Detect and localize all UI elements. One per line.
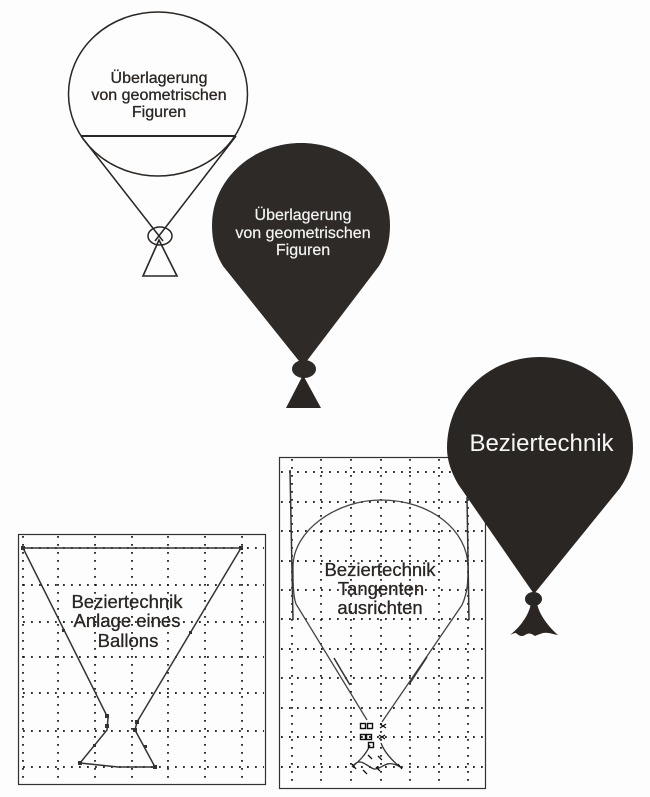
panel: filled Bezier balloon xyxy=(447,357,633,636)
basket triangle xyxy=(286,375,321,408)
neck ellipse xyxy=(525,592,542,606)
panel: Bezier construction frame, balloon outline: Anlage eines xyxy=(74,610,180,631)
rope lines xyxy=(81,136,236,241)
panel: filled balloon from geometric figures: Figuren xyxy=(276,242,330,259)
icon: envelope ellipse xyxy=(68,12,248,176)
panel: Bezier construction frame, balloon outline: Ballons xyxy=(98,630,158,651)
neck ellipse xyxy=(148,227,172,245)
chord line xyxy=(81,135,236,137)
label: Bezier tangents: Beziertechnik xyxy=(324,559,436,580)
panel: outline balloon from geometric figures: Figuren xyxy=(132,104,186,121)
skirt xyxy=(352,743,400,769)
panel: filled balloon from geometric figures: von geometrischen xyxy=(235,225,371,242)
tangent handles xyxy=(290,470,469,685)
label: Bezier construction: Beziertechnik xyxy=(71,591,183,612)
panel: Bezier tangent frame xyxy=(280,458,486,788)
anchor points xyxy=(21,546,243,769)
panel: Bezier construction frame, balloon outline xyxy=(18,534,266,784)
dotted grid xyxy=(23,536,264,783)
frame xyxy=(280,458,486,788)
balloon body xyxy=(212,143,390,366)
label: outline balloon: Überlagerung xyxy=(111,69,207,87)
panel: Bezier tangent frame: Tangenten xyxy=(338,578,424,599)
dotted grid xyxy=(281,459,484,786)
cross markers xyxy=(352,724,402,774)
frame xyxy=(18,534,266,784)
neck ellipse xyxy=(292,360,316,378)
balloon body xyxy=(447,357,633,594)
panel: Bezier tangent frame: ausrichten xyxy=(337,597,423,618)
label: filled Bezier balloon: Beziertechnik xyxy=(469,430,615,457)
panel: outline balloon from geometric figures xyxy=(68,12,248,276)
panel: outline balloon from geometric figures: von geometrischen xyxy=(91,87,227,104)
label: filled balloon: Überlagerung xyxy=(255,206,351,224)
Bezier balloon outline xyxy=(293,500,468,722)
handle boxes xyxy=(360,724,374,748)
panel: filled balloon from geometric figures xyxy=(212,143,390,408)
basket triangle xyxy=(143,240,177,276)
flared skirt xyxy=(510,603,558,636)
Bezier outline xyxy=(23,548,241,767)
